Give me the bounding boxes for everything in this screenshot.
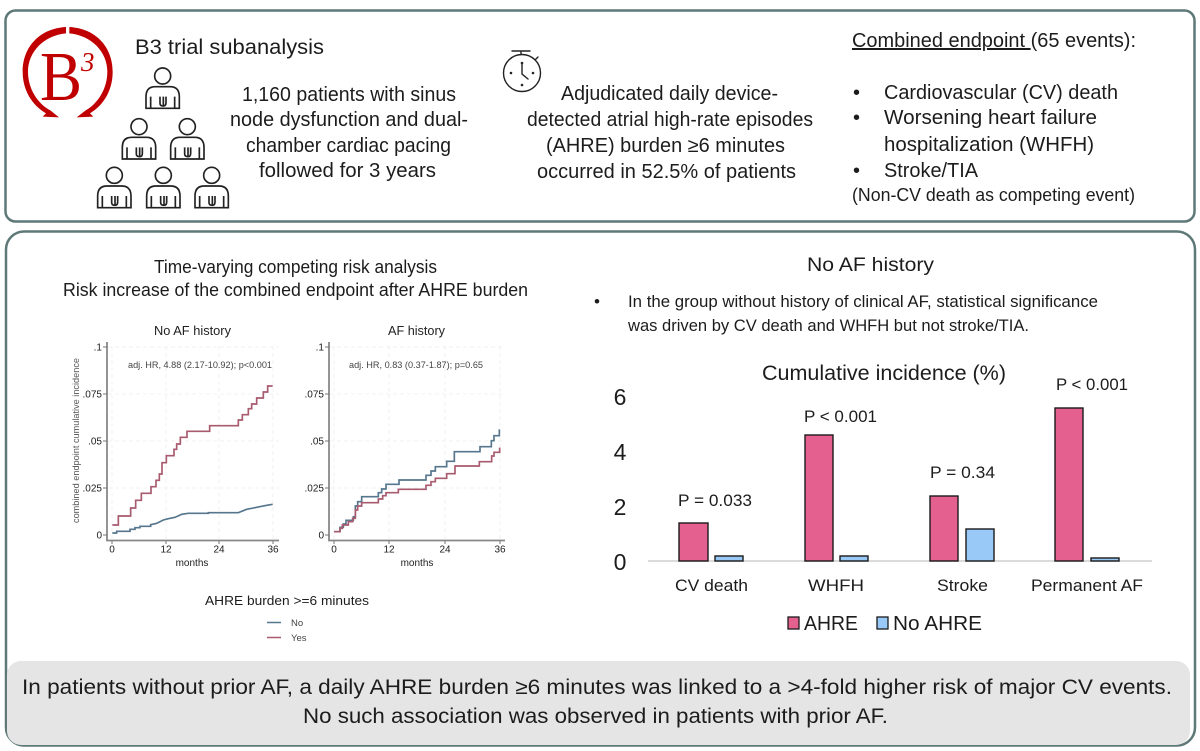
line: no AF, AHRE yes xyxy=(112,386,273,525)
text: AHRE burden xyxy=(527,83,813,183)
chart: cumulative incidence bars: P < 0.001 xyxy=(804,407,877,426)
heading: B3 trial subanalysis: B3 trial subanalysis xyxy=(135,36,324,59)
line: no AF, AHRE no xyxy=(112,504,273,533)
text: AHRE burden: Adjudicated daily device- xyxy=(561,83,778,105)
line: AF, AHRE yes xyxy=(334,448,500,532)
heading: time-varying analysis: Time-varying competing risk analysis xyxy=(154,256,437,277)
text: combined endpoint list: Cardiovascular (CV) death xyxy=(884,82,1118,104)
icon: B3 logo: B xyxy=(40,39,82,116)
chart: no AF history: No AF history xyxy=(154,324,232,338)
chart: no AF history: .1 xyxy=(94,342,102,354)
chart: cumulative incidence bars: 4 xyxy=(614,439,627,465)
chart: no AF history: adj. HR, 4.88 (2.17-10.92); p<0.001 xyxy=(128,360,272,370)
legend: AHRE vs no AHRE xyxy=(788,613,982,635)
icon: B3 logo xyxy=(23,27,113,117)
chart: cumulative incidence bars xyxy=(614,362,1152,635)
chart: AF history: months xyxy=(401,558,433,569)
chart: AF history: 0 xyxy=(318,530,324,542)
text: significance bullet: In the group without history of clinical AF, statistical significance xyxy=(628,292,1098,311)
text: combined endpoint list: Combined endpoint (65 events): xyxy=(852,30,1136,52)
chart: AF history: 24 xyxy=(439,544,451,556)
chart: AF history: .025 xyxy=(305,484,324,494)
chart: cumulative incidence bars: 6 xyxy=(614,384,626,410)
chart: no AF history xyxy=(71,324,279,569)
chart: no AF history: combined endpoint cumulative incidence xyxy=(71,358,82,523)
chart: AF history: 0 xyxy=(331,544,337,556)
text: patient population: followed for 3 years xyxy=(259,160,436,182)
chart: AF history: adj. HR, 0.83 (0.37-1.87); p=0.65 xyxy=(349,360,483,370)
text: AHRE burden: occurred in 52.5% of patients xyxy=(537,161,796,183)
legend: AHRE burden: No xyxy=(291,618,303,629)
legend: AHRE vs no AHRE: AHRE xyxy=(804,613,858,635)
chart: AF history xyxy=(305,324,506,569)
text: AHRE burden: (AHRE) burden ≥6 minutes xyxy=(546,135,785,157)
chart: no AF history: 12 xyxy=(160,544,172,556)
chart: cumulative incidence bars: Cumulative incidence (%) xyxy=(762,362,1006,385)
heading: time-varying analysis: Risk increase of the combined endpoint after AHRE burden xyxy=(63,279,528,300)
chart: cumulative incidence bars: P = 0.033 xyxy=(678,491,752,510)
text: combined endpoint list: hospitalization (WHFH) xyxy=(884,134,1094,156)
text: combined endpoint list: • xyxy=(853,160,860,182)
icon: patients pyramid xyxy=(98,68,228,208)
chart: cumulative incidence bars: CV death xyxy=(675,576,748,595)
legend: AHRE burden xyxy=(205,594,369,644)
text: significance bullet: was driven by CV death and WHFH but not stroke/TIA. xyxy=(627,316,1029,335)
chart: no AF history: months xyxy=(176,558,208,569)
chart: cumulative incidence bars: WHFH xyxy=(808,576,864,595)
chart: cumulative incidence bars: Stroke xyxy=(937,576,988,595)
chart: no AF history: .025 xyxy=(83,484,102,494)
heading: time-varying analysis xyxy=(63,256,528,300)
icon: stopwatch xyxy=(504,51,540,92)
chart: AF history: AF history xyxy=(388,324,446,338)
legend: AHRE vs no AHRE: No AHRE xyxy=(893,613,982,635)
chart: no AF history: 0 xyxy=(96,530,102,542)
chart: cumulative incidence bars: P < 0.001 xyxy=(1056,375,1128,394)
text: combined endpoint list: (Non-CV death as competing event) xyxy=(852,185,1135,205)
text: patient population: node dysfunction and dual- xyxy=(230,109,468,131)
chart: no AF history: .075 xyxy=(83,390,102,400)
chart: AF history: 12 xyxy=(383,544,395,556)
chart: cumulative incidence bars: Permanent AF xyxy=(1031,576,1143,595)
text: patient population: 1,160 patients with sinus xyxy=(242,84,456,106)
chart: no AF history: 24 xyxy=(213,544,225,556)
chart: no AF history: 0 xyxy=(109,544,115,556)
text: patient population: chamber cardiac pacing xyxy=(246,135,451,157)
chart: AF history: 36 xyxy=(494,544,506,556)
text: combined endpoint list xyxy=(852,30,1136,205)
chart: AF history: .05 xyxy=(310,436,324,448)
callout: conclusion: In patients without prior AF, a daily AHRE burden ≥6 minutes was linked to a >4-fold higher risk of major CV events. xyxy=(22,676,1172,699)
chart: cumulative incidence bars: 2 xyxy=(614,494,626,520)
callout: conclusion xyxy=(7,661,1190,745)
callout: conclusion: No such association was observed in patients with prior AF. xyxy=(303,705,888,728)
text: patient population xyxy=(230,84,468,182)
chart: cumulative incidence bars: 0 xyxy=(614,549,626,575)
panel: results xyxy=(6,232,1195,746)
text: combined endpoint list: Worsening heart failure xyxy=(884,107,1097,129)
text: AHRE burden: detected atrial high-rate episodes xyxy=(527,109,813,131)
text: significance bullet xyxy=(594,292,1098,335)
chart: no AF history: .05 xyxy=(88,436,102,448)
legend: AHRE burden: Yes xyxy=(291,633,307,644)
chart: AF history: .1 xyxy=(316,342,324,354)
panel: study overview xyxy=(6,10,1194,222)
heading: No AF history: No AF history xyxy=(807,255,935,276)
text: combined endpoint list: • xyxy=(853,82,860,104)
chart: AF history: .075 xyxy=(305,390,324,400)
text: combined endpoint list: • xyxy=(853,107,860,129)
text: combined endpoint list: Stroke/TIA xyxy=(884,160,979,182)
line: AF, AHRE no xyxy=(334,429,499,532)
text: significance bullet: • xyxy=(594,292,600,311)
icon: B3 logo: 3 xyxy=(80,47,94,77)
chart: cumulative incidence bars: P = 0.34 xyxy=(930,463,995,482)
legend: AHRE burden: AHRE burden >=6 minutes xyxy=(205,594,369,608)
chart: no AF history: 36 xyxy=(267,544,279,556)
